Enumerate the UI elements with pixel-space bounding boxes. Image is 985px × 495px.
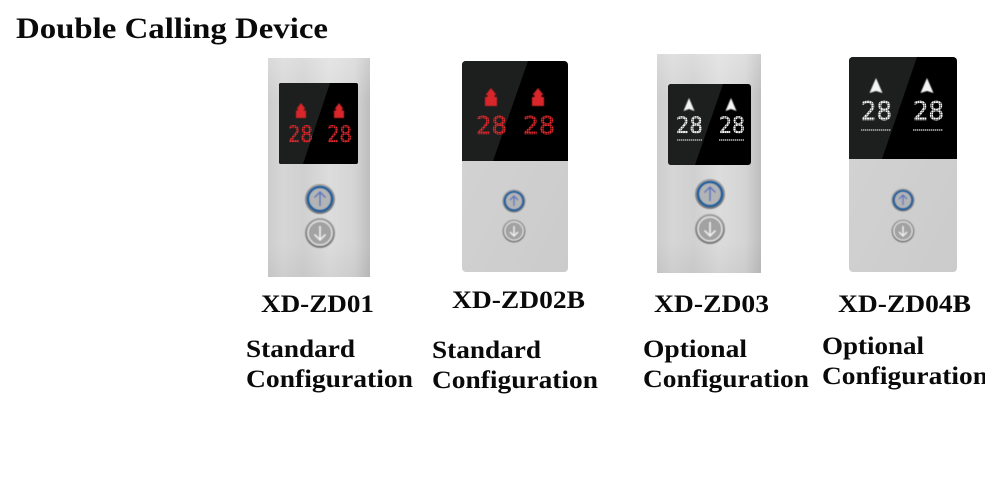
icon: red up arrows xyxy=(296,103,344,118)
floor numbers: 28 xyxy=(327,123,352,148)
down button xyxy=(305,218,335,248)
floor numbers: 28 xyxy=(719,114,745,139)
panel: XD-ZD01 xyxy=(268,58,370,277)
text: configuration XD-ZD02B: Standard xyxy=(432,337,541,364)
status captions xyxy=(861,129,943,131)
text: configuration XD-ZD03: Configuration xyxy=(643,366,809,393)
text: configuration XD-ZD02B xyxy=(432,337,598,394)
panel: XD-ZD02B xyxy=(462,61,568,272)
display xyxy=(849,57,957,159)
down button xyxy=(695,214,725,244)
floor numbers xyxy=(676,114,745,139)
text: configuration XD-ZD03: Optional xyxy=(643,336,747,363)
title: Double Calling Device xyxy=(16,12,328,45)
floor numbers xyxy=(861,97,944,127)
text: configuration XD-ZD02B: Configuration xyxy=(432,367,598,394)
text: configuration XD-ZD04B: Configuration xyxy=(822,363,985,390)
text: configuration XD-ZD04B xyxy=(822,333,985,390)
panel: XD-ZD03 xyxy=(657,54,761,273)
text: configuration XD-ZD01 xyxy=(246,336,413,393)
display xyxy=(279,83,358,164)
up button xyxy=(695,179,725,209)
label: XD-ZD04B: XD-ZD04B xyxy=(838,291,971,318)
label: XD-ZD03: XD-ZD03 xyxy=(654,291,769,318)
floor numbers: 28 xyxy=(676,114,703,139)
display xyxy=(462,61,568,161)
down button xyxy=(892,220,914,242)
up button xyxy=(305,184,335,214)
text: configuration XD-ZD04B: Optional xyxy=(822,333,924,360)
down button xyxy=(502,220,526,242)
floor numbers: 28 xyxy=(523,111,555,140)
icon: white up arrows xyxy=(870,78,934,93)
text: configuration XD-ZD01: Configuration xyxy=(246,366,413,393)
floor numbers: 28 xyxy=(913,97,944,127)
icon: red up arrows xyxy=(485,88,544,106)
label: XD-ZD01: XD-ZD01 xyxy=(261,291,374,318)
floor numbers: 28 xyxy=(288,123,313,148)
up button xyxy=(502,190,526,212)
panel: XD-ZD04B xyxy=(849,57,957,272)
label: XD-ZD02B: XD-ZD02B xyxy=(452,287,585,314)
brushed faceplate xyxy=(849,57,957,272)
steel faceplate xyxy=(657,54,761,273)
text: configuration XD-ZD01: Standard xyxy=(246,336,355,363)
floor numbers: 28 xyxy=(476,111,507,140)
floor numbers xyxy=(476,111,555,140)
floor numbers xyxy=(288,123,352,148)
text: configuration XD-ZD03 xyxy=(643,336,809,393)
steel faceplate xyxy=(268,58,370,277)
floor numbers: 28 xyxy=(861,97,892,127)
brushed faceplate xyxy=(462,61,568,272)
status captions xyxy=(677,139,744,141)
up button xyxy=(892,188,914,212)
icon: white up arrows xyxy=(684,98,736,111)
display xyxy=(668,84,751,165)
